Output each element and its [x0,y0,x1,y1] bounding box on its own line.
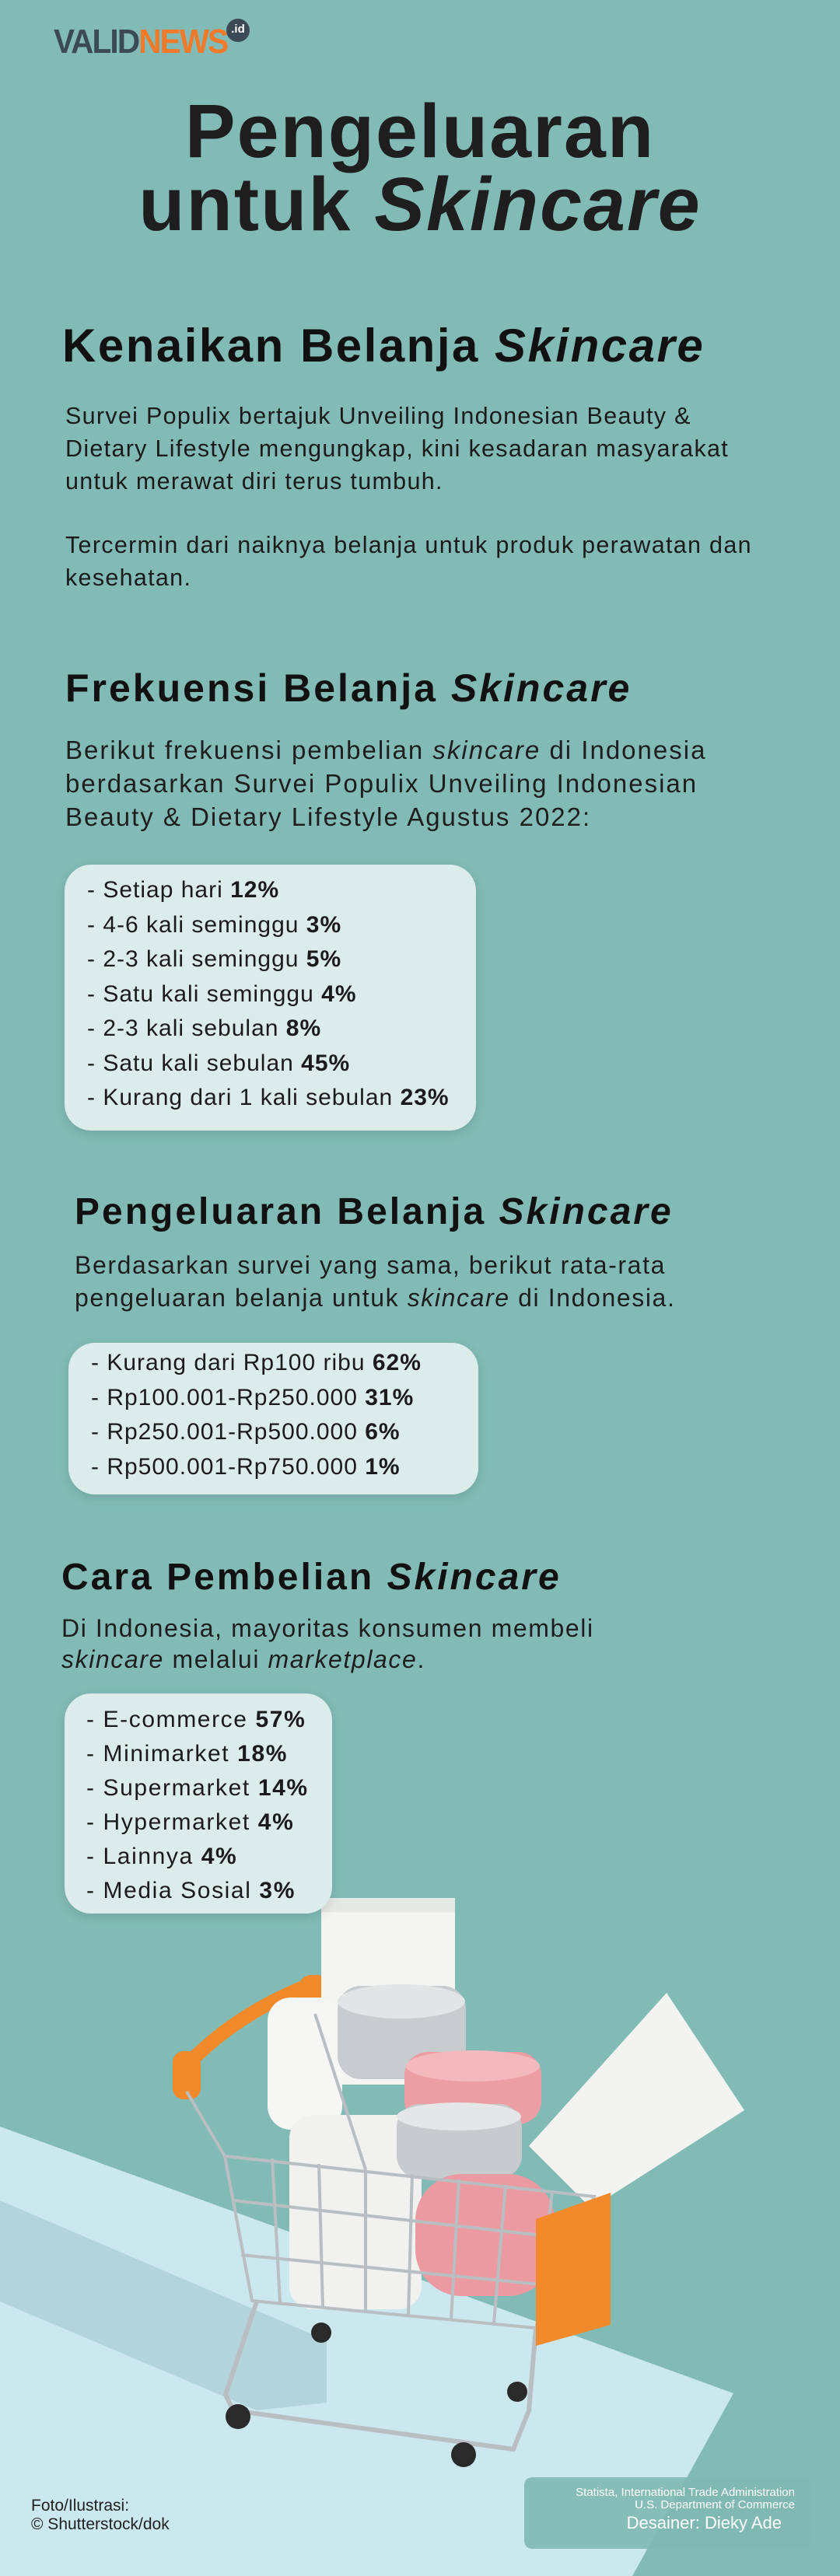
panel: frekuensi list: - 4-6 kali seminggu 3% [87,911,341,938]
text: intro: untuk merawat diri terus tumbuh. [65,468,443,495]
text: frekuensi: berdasarkan Survei Populix Unveiling Indonesian [65,769,698,798]
panel: cara list [65,1693,332,1914]
products [268,1898,744,2309]
floor [0,2127,733,2576]
text: frekuensi [65,736,706,831]
panel: cara list: - Minimarket 18% [86,1741,288,1767]
panel: pengeluaran list: - Rp500.001-Rp750.000 1% [91,1454,401,1479]
panel: pengeluaran list: - Kurang dari Rp100 ribu 62% [91,1350,422,1375]
panel: pengeluaran list: - Rp100.001-Rp250.000 31% [91,1384,414,1410]
text: cara: skincare melalui marketplace. [61,1645,425,1673]
panel: pengeluaran list [68,1343,478,1494]
photo credit: © Shutterstock/dok [31,2515,170,2533]
heading: Cara: Cara Pembelian Skincare [61,1557,562,1598]
title: untuk Skincare [138,162,702,246]
photo credit [31,2497,170,2533]
cart handle [173,1975,330,2099]
panel: frekuensi list: - 2-3 kali sebulan 8% [87,1015,321,1041]
text: pengeluaran: pengeluaran belanja untuk skincare di Indonesia. [75,1284,675,1312]
panel: frekuensi list: - Setiap hari 12% [87,877,279,903]
text: pengeluaran: Berdasarkan survei yang sama, berikut rata-rata [75,1251,666,1279]
logo: .id [231,23,245,36]
sources credit: Statista, International Trade Administration [576,2486,795,2499]
text: intro [65,403,729,495]
text: frekuensi: Beauty & Dietary Lifestyle Agustus 2022: [65,802,591,831]
sources credit: U.S. Department of Commerce [635,2498,795,2511]
text: intro: Dietary Lifestyle mengungkap, kini kesadaran masyarakat [65,435,729,462]
panel: cara list: - Supermarket 14% [86,1775,309,1801]
heading: Kenaikan: Kenaikan Belanja Skincare [62,320,705,372]
title: Pengeluaran [185,89,655,173]
wheels [226,2323,527,2467]
scene: shopping cart photo [0,1898,744,2576]
panel: frekuensi list [65,865,476,1131]
panel: cara list: - Hypermarket 4% [86,1809,294,1835]
cart front panel [536,2193,611,2346]
credits box [524,2477,811,2549]
panel: frekuensi list: - Satu kali sebulan 45% [87,1050,350,1076]
text: pengeluaran [75,1251,675,1312]
text: intro 2: Tercermin dari naiknya belanja untuk produk perawatan dan [65,532,752,558]
sources credit [576,2486,795,2532]
heading: Pengeluaran: Pengeluaran Belanja Skincare [75,1191,674,1232]
panel: pengeluaran list: - Rp250.001-Rp500.000 6% [91,1419,401,1445]
panel: frekuensi list: - 2-3 kali seminggu 5% [87,946,341,972]
cart basket wires [187,2014,594,2449]
title [138,89,702,246]
text: cara [61,1614,594,1673]
panel: cara list: - E-commerce 57% [86,1707,306,1732]
panel: cara list: - Lainnya 4% [86,1844,237,1869]
text: intro: Survei Populix bertajuk Unveiling Indonesian Beauty & [65,403,691,429]
panel: frekuensi list: - Kurang dari 1 kali sebulan 23% [87,1085,450,1110]
panel: frekuensi list: - Satu kali seminggu 4% [87,981,356,1006]
text: intro 2: kesehatan. [65,564,191,591]
logo: VALIDNEWS [54,23,227,61]
text: frekuensi: Berikut frekuensi pembelian skincare di Indonesia [65,736,706,764]
sources credit: Desainer: Dieky Ade [627,2513,782,2532]
heading: Frekuensi: Frekuensi Belanja Skincare [65,666,632,710]
panel: cara list: - Media Sosial 3% [86,1878,296,1903]
text: intro 2 [65,532,752,591]
photo credit: Foto/Ilustrasi: [31,2497,129,2515]
text: cara: Di Indonesia, mayoritas konsumen membeli [61,1614,594,1642]
